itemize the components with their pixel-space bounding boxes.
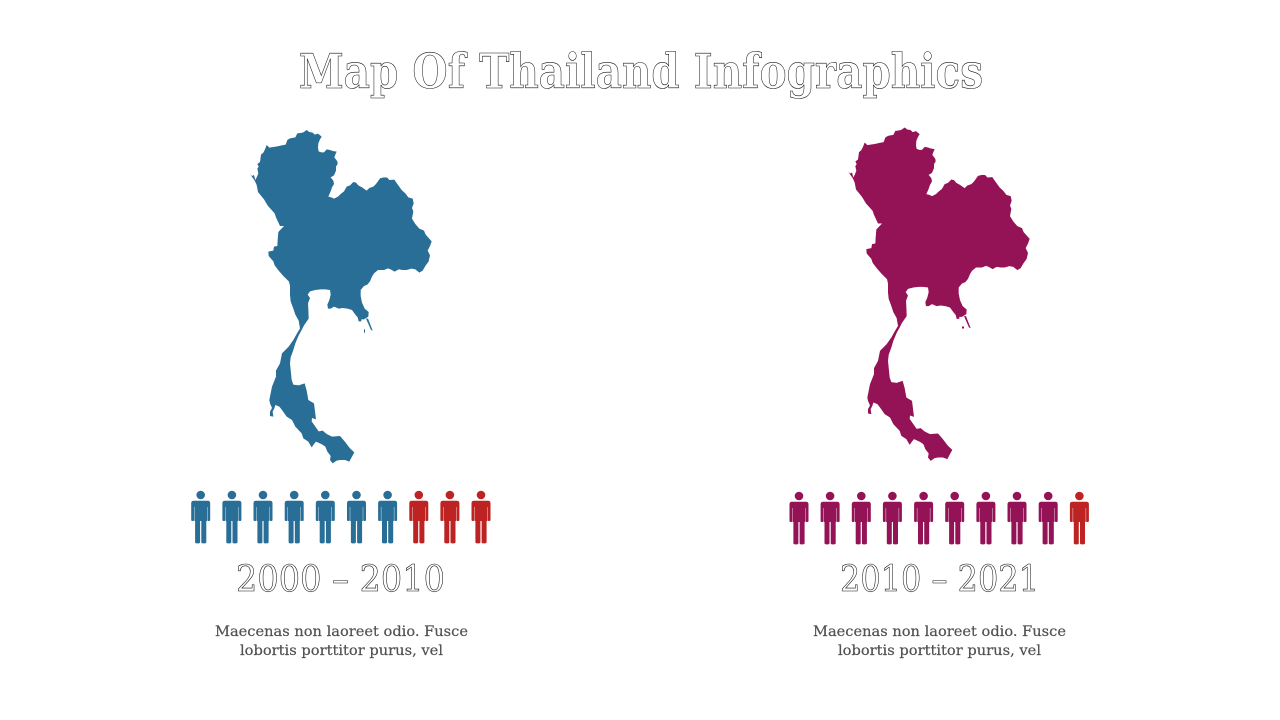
text block: left description: Maecenas non laoreet odio. Fusce [215,624,468,640]
map: Thailand, blue [250,130,432,463]
heading: 2010 - 2021: 2010 – 2021 [840,558,1039,600]
title: Map Of Thailand Infographics [299,44,983,100]
text block: right description [813,624,1066,659]
people row: 2010-2021 [790,492,1089,544]
heading: 2000 - 2010: 2000 – 2010 [236,558,445,600]
text block: right description: lobortis porttitor purus, vel [838,643,1042,659]
text block: right description: Maecenas non laoreet odio. Fusce [813,624,1066,640]
text block: left description [215,624,468,659]
people row: 2000-2010 [191,491,490,543]
map: Thailand, magenta [848,127,1030,461]
text block: left description: lobortis porttitor purus, vel [240,643,444,659]
